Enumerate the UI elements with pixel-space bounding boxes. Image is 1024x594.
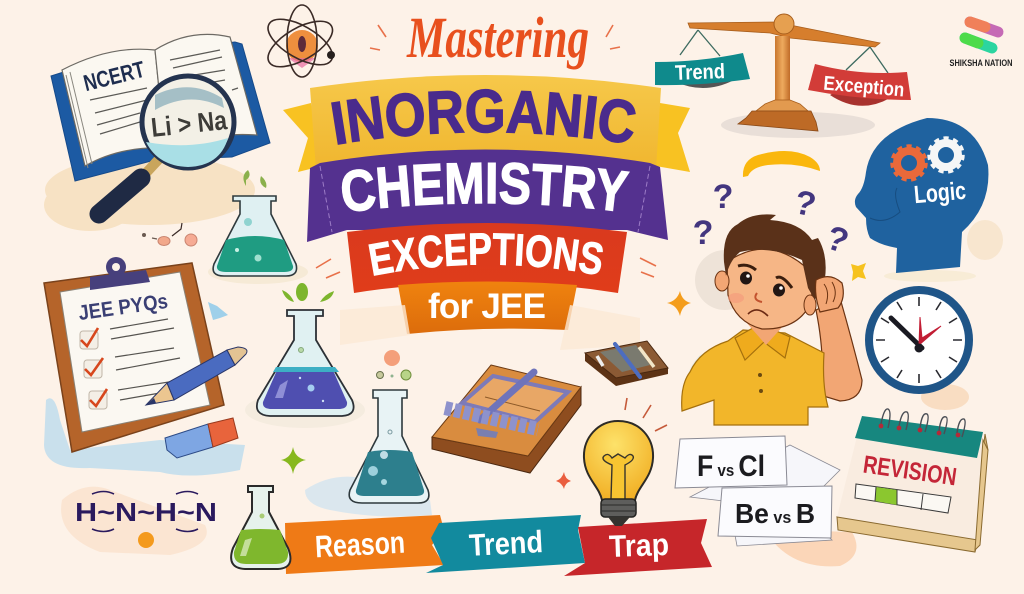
logo: Shiksha Nation: SHIKSHA NATION [950,58,1012,68]
icon: atom [261,5,339,77]
ribbon: Trend [426,515,585,573]
banner: INORGANIC: INORGANIC [331,88,636,145]
banner: CHEMISTRY: CHEMISTRY [342,162,630,212]
eyes & brows [740,272,752,284]
icon: purple flask [245,283,365,428]
banner: EXCEPTIONS: EXCEPTIONS [368,233,603,276]
icon: pencil [146,347,247,405]
icon: head with gears, Logic [855,118,1003,282]
yellow arc [743,151,820,177]
ribbon: Reason: Reason [314,525,406,564]
scale label: Exception [808,64,911,101]
flash card: Be vs B: Be vs B [735,498,815,529]
icon: small green flask [231,486,290,569]
logo: Shiksha Nation [950,22,1012,68]
question marks: ? [693,214,713,252]
bubbles above [376,350,411,380]
icon: wooden card with pin [585,341,668,386]
face [727,249,812,329]
flash card: F vs Cl [675,436,787,488]
ribbon: Trap [564,519,712,576]
ribbon: Trap: Trap [608,527,670,564]
hair [724,214,826,300]
question marks: ? [791,183,819,225]
scale label: Trend [655,53,750,85]
ribbon: Reason [285,515,444,574]
icon: green flask top [208,170,308,284]
accents near banner [316,258,656,278]
scale label: Trend: Trend [675,60,725,85]
flash card: Be vs B [718,486,832,538]
progress grid [855,484,951,513]
clipboard clip [90,257,150,290]
calendar label: REVISION: REVISION [861,451,958,491]
arm [816,298,862,401]
icon: teal flask [305,350,432,517]
molecule doodle [142,223,197,246]
clipboard heading: JEE PYQs: JEE PYQs [77,290,169,325]
ribbon: Trend: Trend [468,524,544,563]
illustration: confused boy [682,214,862,425]
title accents [370,25,620,50]
banner: CHEMISTRY [307,150,668,242]
sparkles [208,263,866,489]
checklist [80,319,180,409]
banner: for JEE: for JEE [428,287,546,326]
question marks: ? [713,178,733,216]
title banner [283,75,690,334]
question marks: ? [822,219,853,261]
question marks [693,178,853,261]
flash cards [675,436,856,566]
flash card: F vs Cl: F vs Cl [697,450,765,483]
icon: magnifier [99,76,234,214]
flask bubble top [282,283,334,302]
scale label: Exception: Exception [823,73,905,101]
molecule formula: H-N-H-N: H~N~H~N [75,497,217,527]
icon: revision calendar [837,409,988,552]
icon: white gear [930,138,962,172]
molecule formula: H-N-H-N [61,487,217,555]
banner: for JEE [398,282,577,334]
book heading: NCERT: NCERT [81,56,147,96]
panel: JEE PYQs clipboard [44,257,247,476]
icon: balance scale [655,14,911,138]
hand [816,277,843,312]
panel: NCERT book with magnifier [44,34,270,231]
head label: Logic: Logic [913,177,967,209]
icon: light bulb [584,398,667,526]
icon: eraser [165,418,238,458]
ribbon tails [283,103,690,172]
neck [746,322,784,345]
icon: magnifier: Li > Na [150,105,229,143]
icon: orange gear [892,146,926,180]
calendar rings [879,409,965,437]
icon: analog clock [869,290,969,410]
title: Mastering: Mastering [406,5,589,70]
soft blob under banner [340,305,640,350]
icon: mousetrap [432,365,581,473]
shirt [682,330,828,425]
